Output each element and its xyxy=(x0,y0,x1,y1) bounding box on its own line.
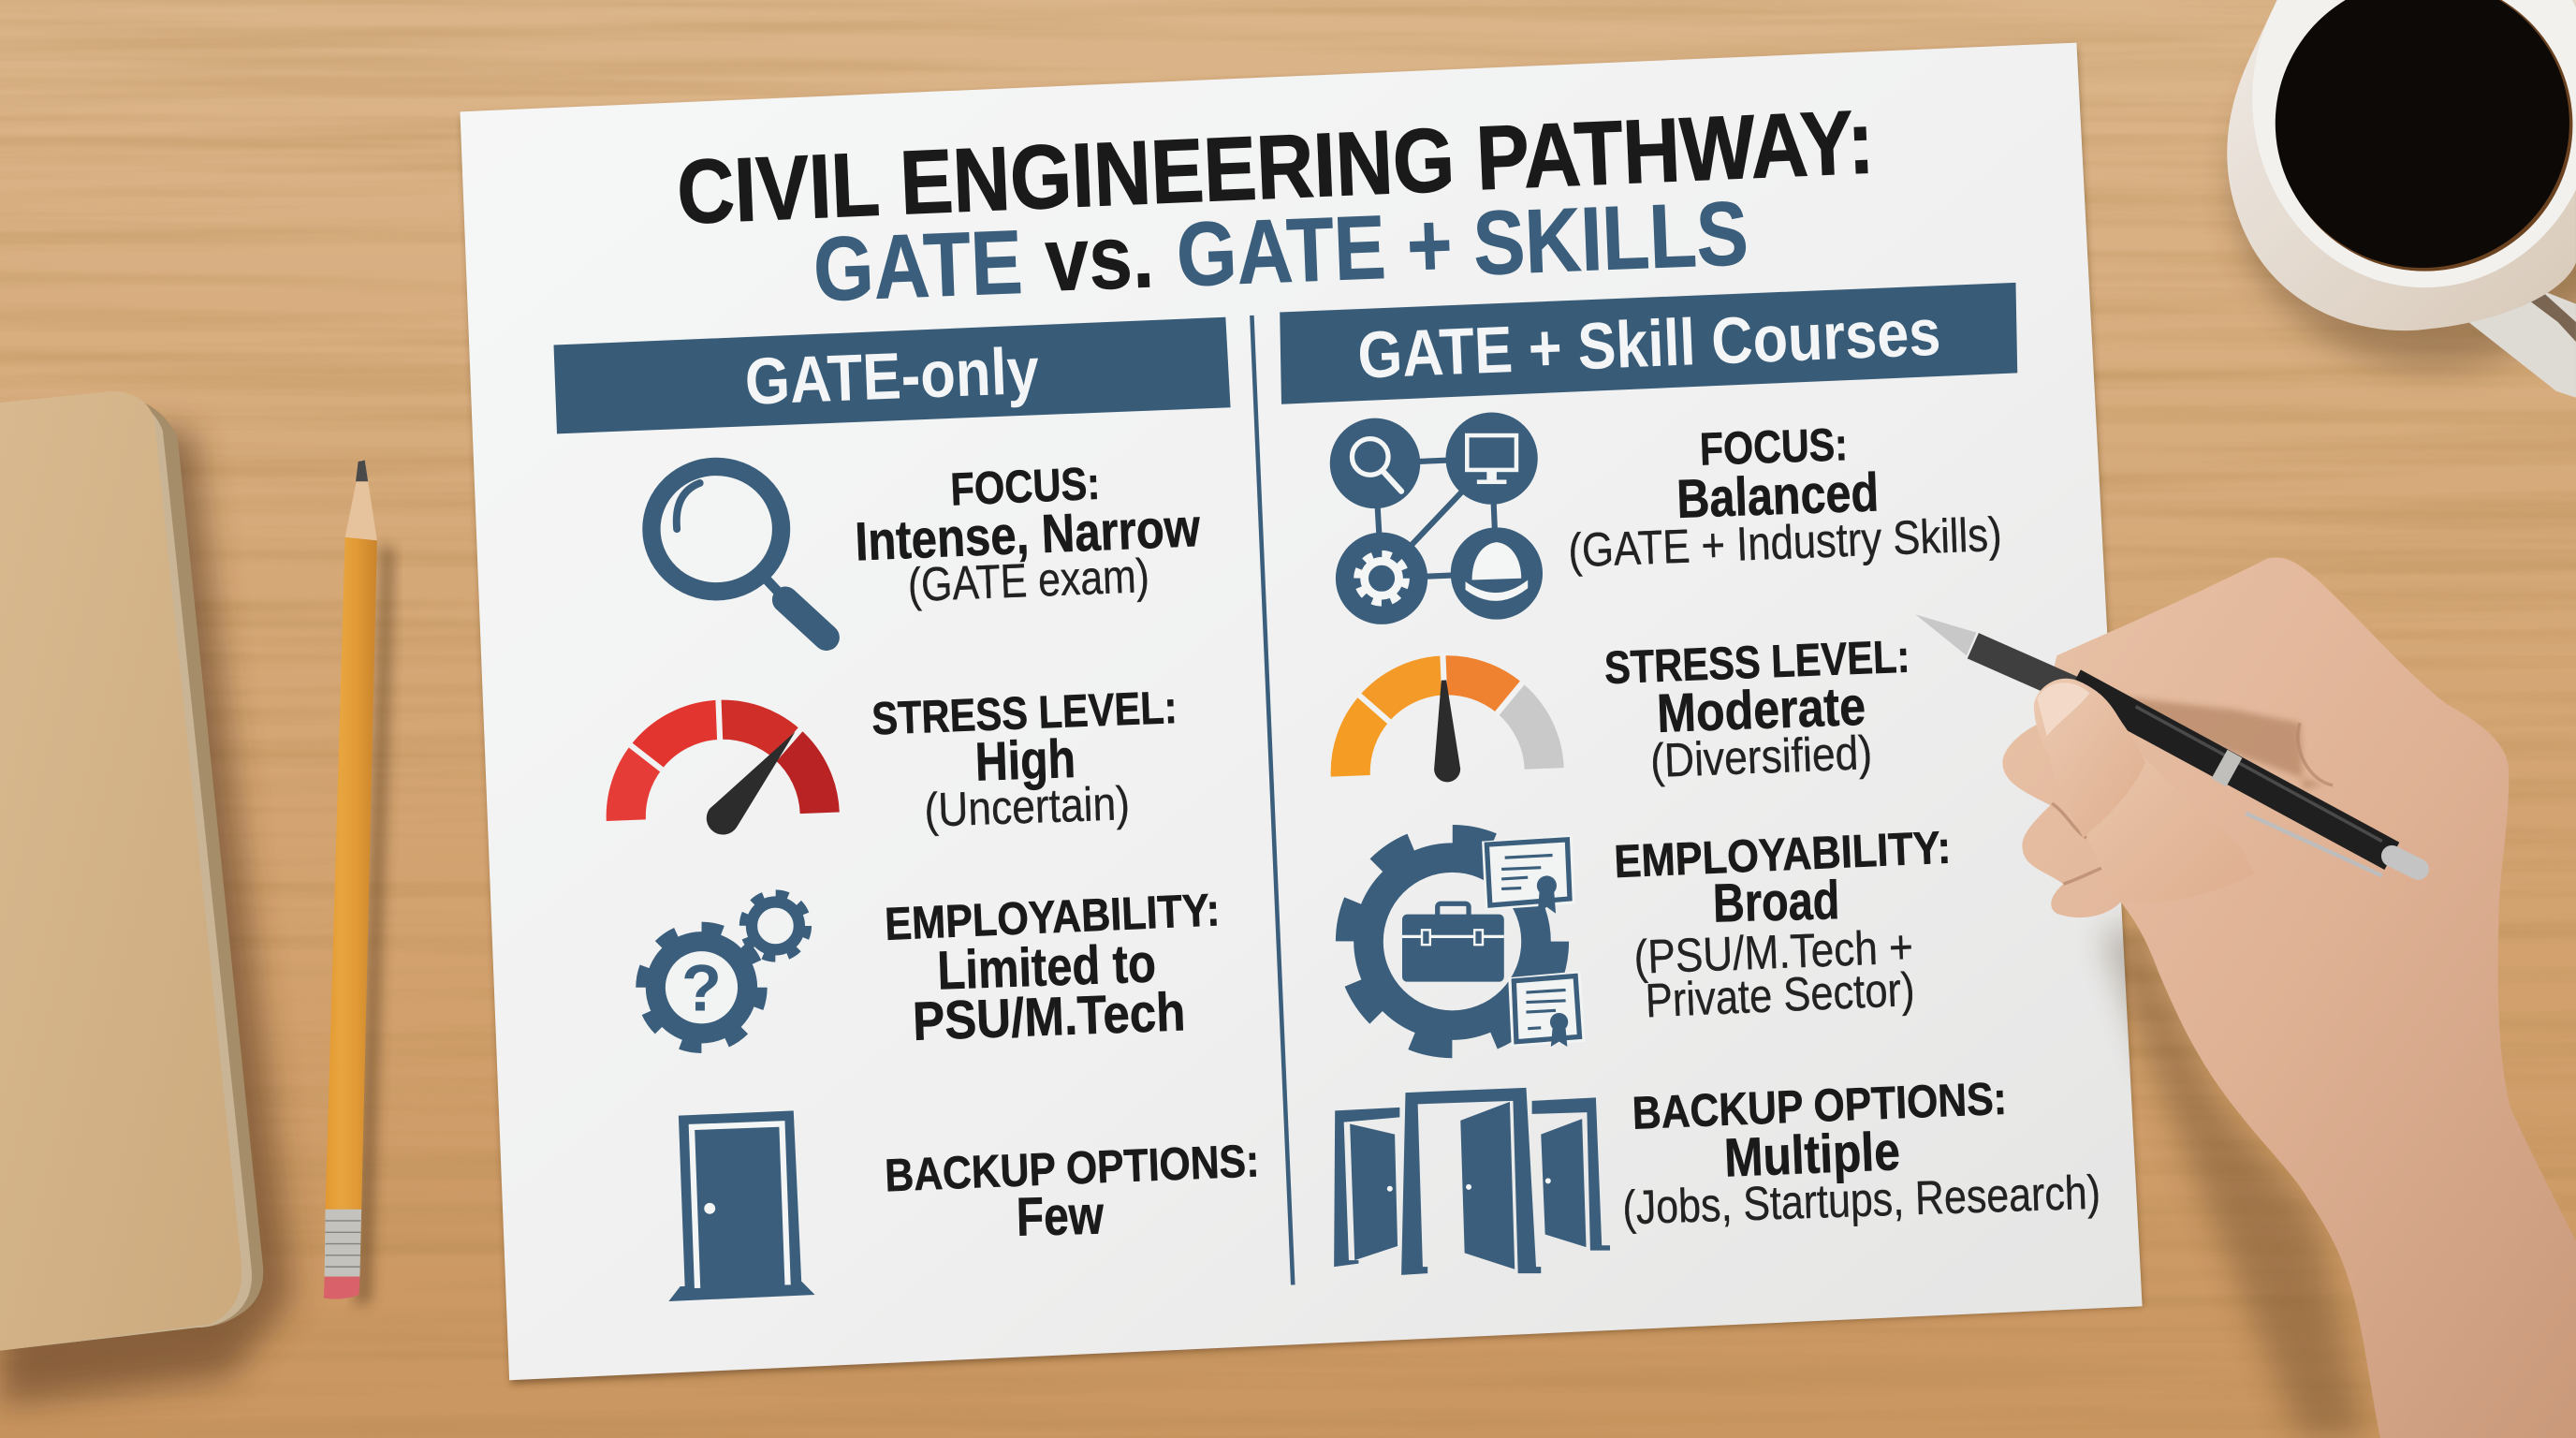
hand holding pen xyxy=(1915,557,2576,1438)
gauge needle xyxy=(703,731,799,835)
hand and wrist xyxy=(2002,557,2576,1438)
centre door xyxy=(1401,1088,1541,1275)
node: gear xyxy=(1336,533,1427,624)
paper sheet xyxy=(460,43,2143,1384)
small gear xyxy=(745,895,806,956)
title: CIVIL ENGINEERING PATHWAY: xyxy=(675,92,1876,243)
text: backup, GATE only xyxy=(884,1136,1260,1248)
icon: multiple doors xyxy=(1334,1088,1610,1275)
text: backup, GATE only: Few xyxy=(1016,1185,1105,1248)
text: employability, GATE plus skills: Private Sector) xyxy=(1645,962,1916,1027)
text: stress, GATE only xyxy=(871,682,1178,837)
large gear: ? xyxy=(681,950,722,1024)
icon: gear with briefcase and certificates xyxy=(1351,835,1586,1047)
thumb tip xyxy=(2034,679,2145,838)
node: hard hat xyxy=(1451,527,1543,620)
text: focus, GATE only: (GATE exam) xyxy=(907,549,1150,611)
text: stress, GATE only: STRESS LEVEL: xyxy=(871,682,1178,744)
text: focus, GATE only xyxy=(854,459,1202,611)
text: stress, GATE plus skills: Moderate xyxy=(1656,677,1866,744)
header: GATE + Skill Courses: GATE + Skill Courses xyxy=(1356,295,1942,392)
icon: magnifier xyxy=(651,466,827,638)
text: employability, GATE plus skills xyxy=(1613,823,1952,1027)
briefcase xyxy=(1402,903,1504,982)
title xyxy=(675,92,1876,320)
certificate top xyxy=(1482,835,1575,914)
left door xyxy=(1334,1108,1399,1267)
node: computer xyxy=(1445,413,1538,505)
thumb base xyxy=(2052,698,2254,902)
text: stress, GATE only: (Uncertain) xyxy=(924,776,1131,837)
text: employability, GATE only: EMPLOYABILITY: xyxy=(884,885,1221,950)
text: employability, GATE only: PSU/M.Tech xyxy=(912,982,1186,1052)
text: employability, GATE plus skills: EMPLOYABILITY: xyxy=(1613,823,1952,888)
icon: gears with question mark xyxy=(646,895,806,1043)
coffee mug xyxy=(2227,0,2576,398)
text: backup, GATE plus skills: (Jobs, Startups, Research) xyxy=(1622,1166,2101,1234)
text: focus, GATE plus skills: (GATE + Industry Skills) xyxy=(1567,507,2003,577)
icon: moderate stress gauge xyxy=(1346,651,1544,785)
text: focus, GATE only: Intense, Narrow xyxy=(854,498,1202,572)
mug handle xyxy=(2465,279,2576,398)
text: backup, GATE only: BACKUP OPTIONS: xyxy=(884,1136,1260,1201)
mug body xyxy=(2227,0,2576,330)
subtitle: vs. xyxy=(1044,206,1156,311)
text: backup, GATE plus skills: BACKUP OPTIONS: xyxy=(1632,1074,2008,1139)
text: focus, GATE only: FOCUS: xyxy=(949,459,1101,516)
text: employability, GATE only: Limited to xyxy=(936,933,1157,1002)
text: employability, GATE only xyxy=(884,885,1221,1052)
certificate bottom xyxy=(1508,971,1586,1047)
text: focus, GATE plus skills xyxy=(1567,419,2003,577)
pencil xyxy=(324,460,394,1306)
large gear xyxy=(1351,840,1554,1043)
text: focus, GATE plus skills: Balanced xyxy=(1676,462,1880,530)
icon: skills network xyxy=(1330,413,1543,624)
text: stress, GATE only: High xyxy=(974,729,1076,793)
large gear xyxy=(646,932,757,1043)
shaded fingers behind pen xyxy=(2123,697,2323,788)
header: GATE-only: GATE-only xyxy=(743,333,1040,418)
text: focus, GATE plus skills: FOCUS: xyxy=(1699,419,1849,476)
node: search xyxy=(1330,418,1420,508)
mug rim xyxy=(2252,0,2576,287)
text: employability, GATE plus skills: Broad xyxy=(1712,871,1840,934)
notebook xyxy=(0,391,292,1405)
text: stress, GATE plus skills: (Diversified) xyxy=(1649,726,1873,787)
text: stress, GATE plus skills: STRESS LEVEL: xyxy=(1603,632,1910,694)
text: stress, GATE plus skills xyxy=(1603,632,1910,787)
icon: single door xyxy=(668,1110,815,1301)
text: employability, GATE plus skills: (PSU/M.Tech + xyxy=(1633,919,1914,984)
pen xyxy=(1915,614,2418,875)
coffee xyxy=(2276,0,2572,271)
text: backup, GATE plus skills xyxy=(1622,1074,2101,1234)
gauge needle xyxy=(1430,680,1461,783)
right door xyxy=(1532,1097,1610,1251)
icon: high stress gauge xyxy=(622,695,820,839)
subtitle: GATE + SKILLS xyxy=(1175,183,1750,305)
thumb nail xyxy=(2037,682,2089,736)
subtitle xyxy=(812,183,1750,320)
text: backup, GATE plus skills: Multiple xyxy=(1723,1122,1901,1189)
finger creases xyxy=(2052,723,2333,884)
header: GATE-only xyxy=(554,317,1231,433)
subtitle: GATE xyxy=(812,213,1024,320)
